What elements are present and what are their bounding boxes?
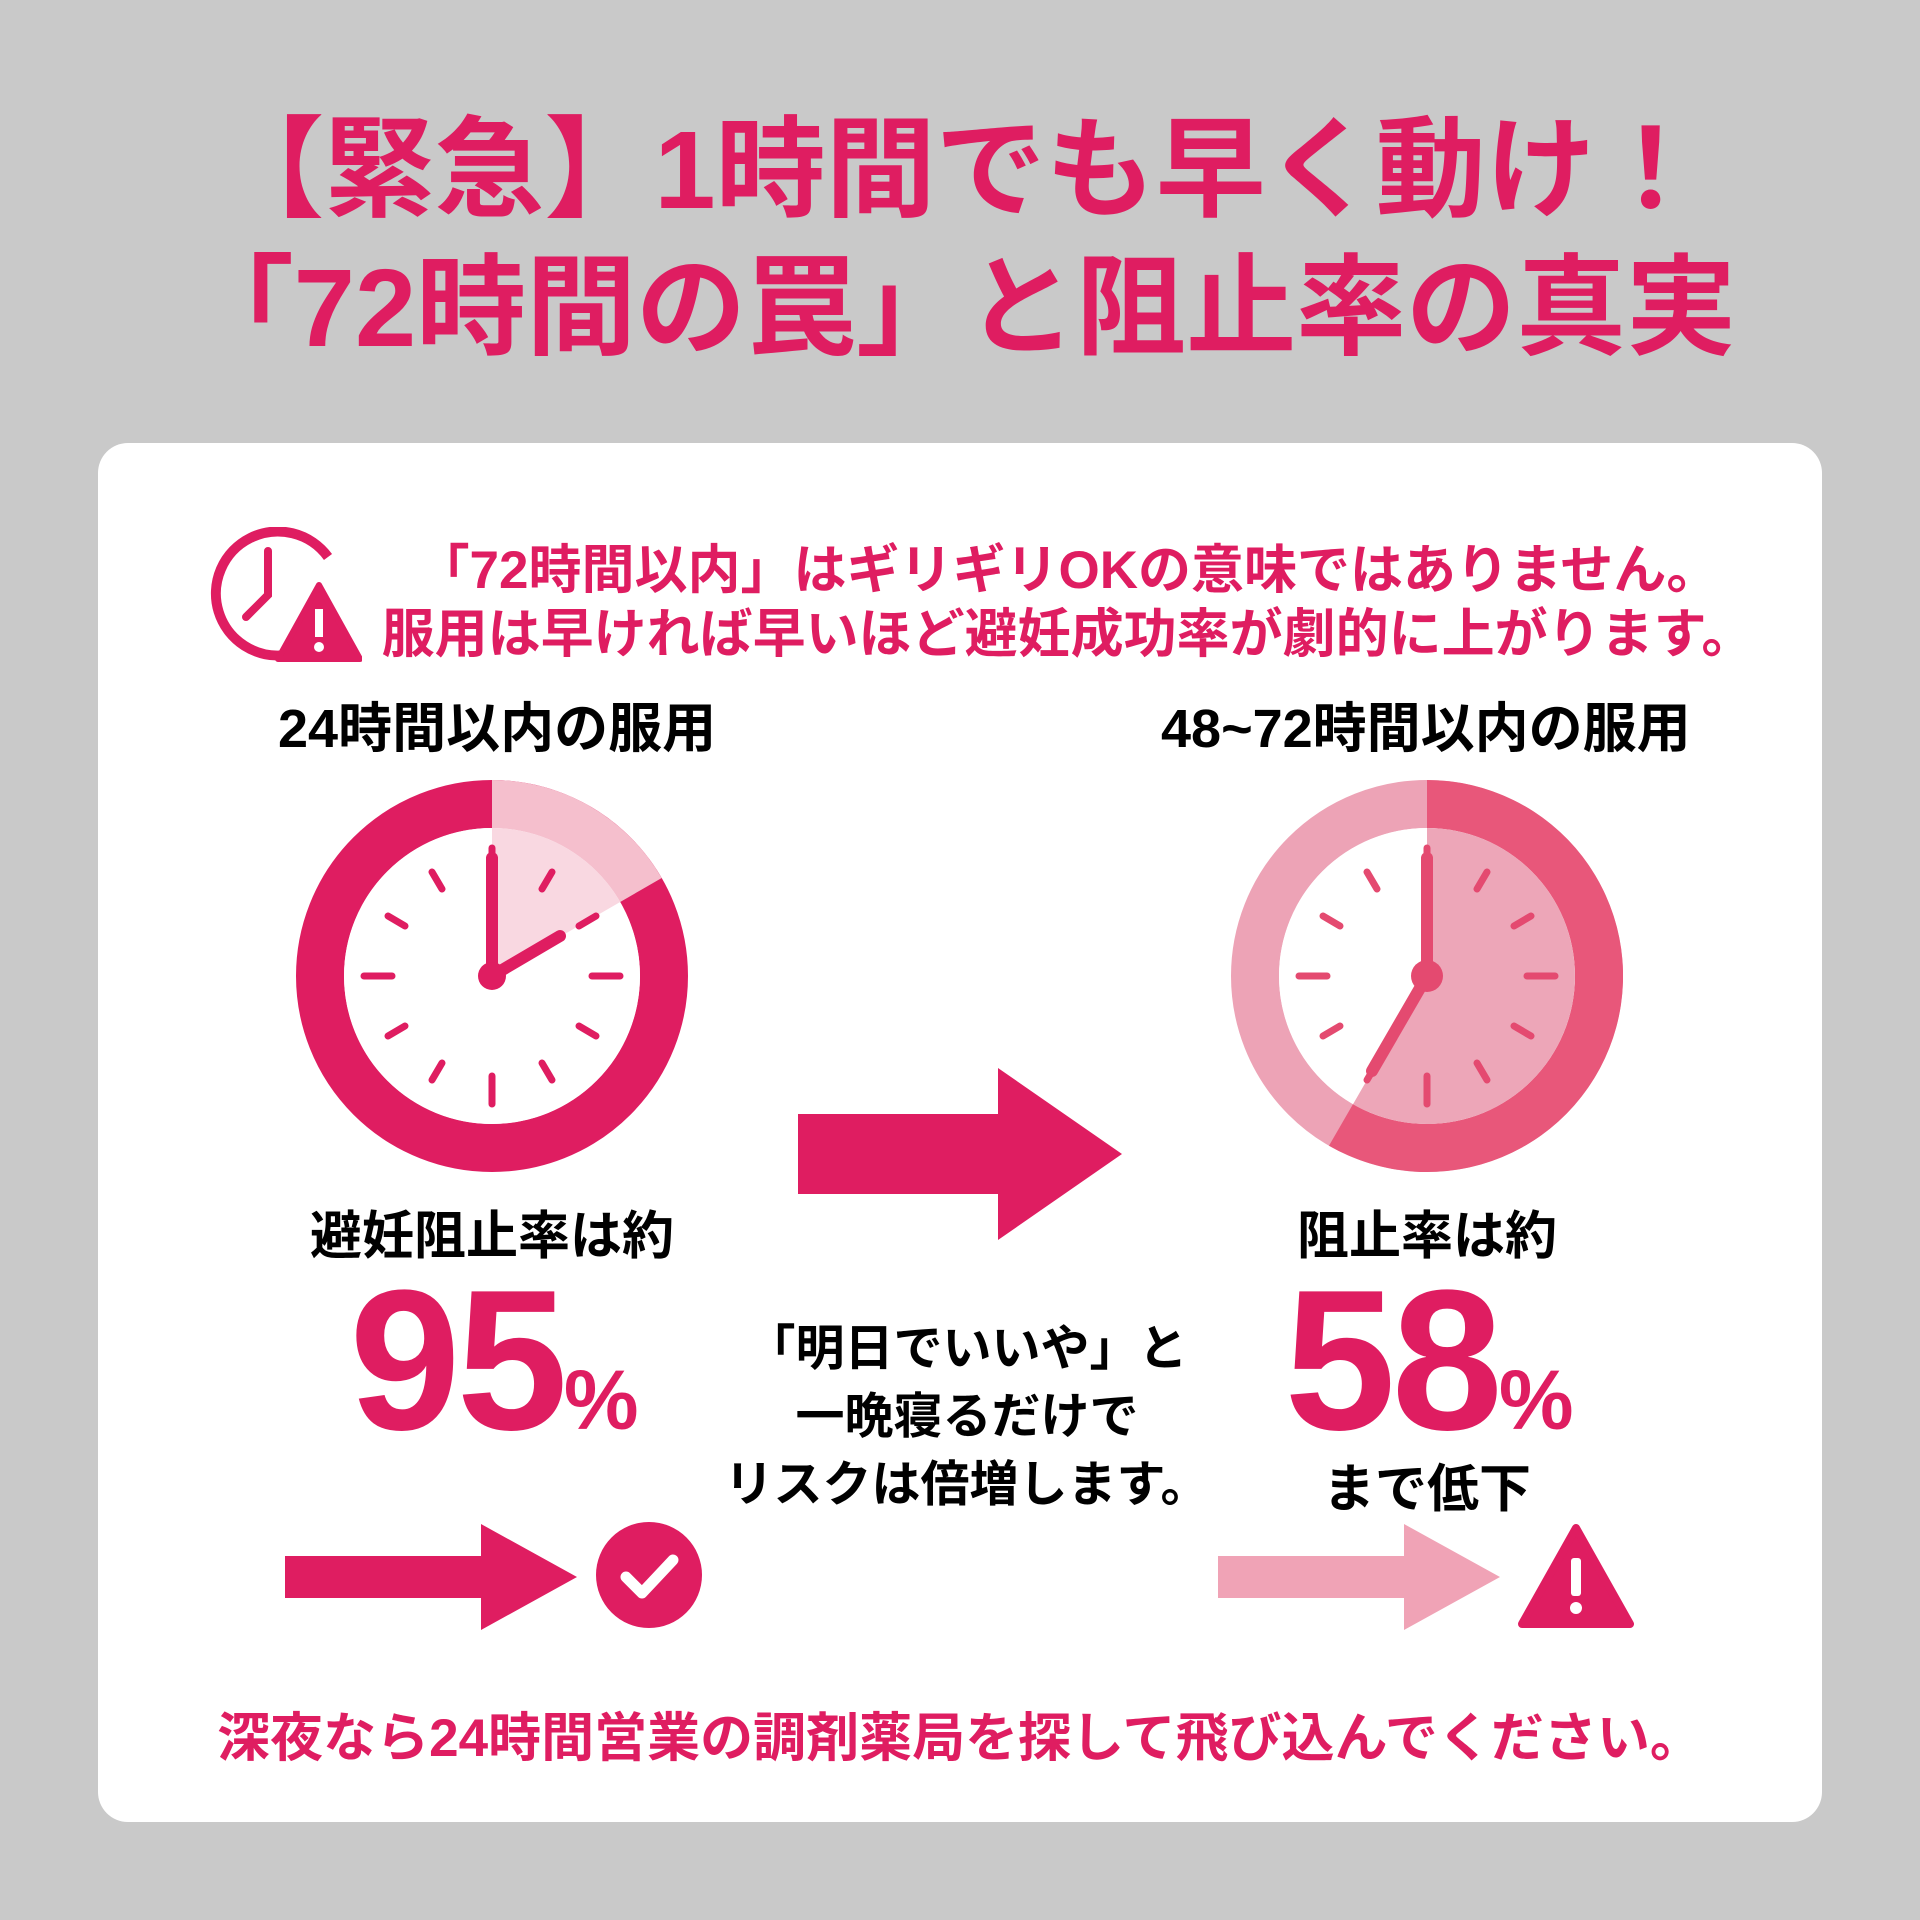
arrow: bottom right: [1218, 1524, 1500, 1630]
arrow: bottom left: [285, 1524, 577, 1630]
title: [184, 109, 1736, 370]
label: stop rate right: 阻止率は約: [1297, 1208, 1557, 1266]
clock left: [296, 780, 688, 1172]
title: 【緊急】1時間でも早く動け！: [214, 109, 1706, 232]
subtitle text: 服用は早ければ早いほど避妊成功率が劇的に上がります。: [382, 605, 1754, 664]
icon: warning: [1518, 1524, 1634, 1628]
number 95%: 95%: [349, 1249, 635, 1472]
stat left: [310, 1208, 674, 1472]
middle text: 一晩寝るだけで: [795, 1390, 1138, 1444]
label left: 24時間以内の服用: [278, 699, 716, 759]
label right: 48~72時間以内の服用: [1161, 699, 1691, 759]
title: 「72時間の罠」と阻止率の真実: [184, 247, 1736, 370]
number 58%: 58%: [1284, 1249, 1570, 1472]
icon: check: [596, 1522, 702, 1628]
caption: drop: まで低下: [1323, 1461, 1531, 1519]
stat right: [1284, 1208, 1572, 1519]
label: stop rate left: 避妊阻止率は約: [310, 1208, 674, 1266]
clock right: [1231, 780, 1623, 1172]
panel: main card: [98, 443, 1822, 1822]
footer text: 深夜なら24時間営業の調剤薬局を探して飛び込んでください。: [217, 1709, 1703, 1768]
subtitle text: [382, 541, 1754, 664]
icon: clock warning: [210, 527, 362, 662]
middle text: 「明日でいいや」と: [746, 1322, 1188, 1376]
middle text: [724, 1322, 1210, 1512]
middle text: リスクは倍増します。: [724, 1458, 1210, 1512]
subtitle text: 「72時間以内」はギリギリOKの意味ではありません。: [417, 541, 1719, 600]
arrow: middle: [798, 1068, 1122, 1240]
